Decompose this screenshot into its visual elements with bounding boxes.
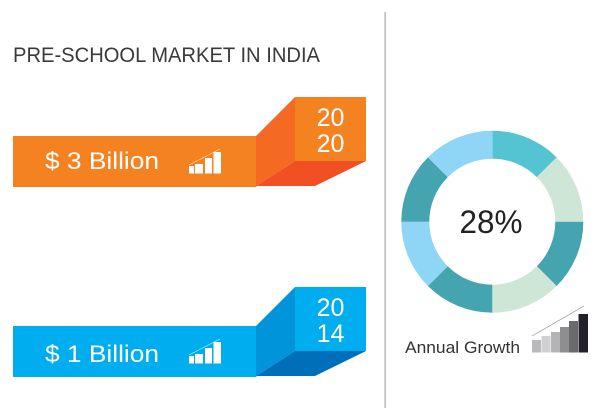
donut value: 28% [460,204,522,240]
value label: $ 3 Billion [45,148,159,175]
year block [295,287,366,351]
annual growth label: Annual Growth [405,339,520,357]
3D side face [256,287,295,376]
year label: 20 [317,294,344,322]
3D bottom face [256,351,366,376]
orange bar [13,136,256,187]
panel: 2014 market size [13,287,366,377]
year block [295,97,366,161]
year label: 20 [317,104,344,132]
icon: growth bars [189,149,221,174]
3D bottom face [256,161,366,186]
icon: growth bars [189,339,221,364]
icon: annual growth bars [532,306,588,352]
year label second line: 14 [317,320,344,348]
3D side face [256,97,295,186]
value label: $ 1 Billion [45,341,159,368]
title: PRE-SCHOOL MARKET IN INDIA [13,44,320,67]
year label second line: 20 [317,130,344,158]
divider [384,12,386,408]
donut chart [401,131,583,313]
panel: 2020 market size [13,97,366,187]
blue bar [13,326,256,377]
